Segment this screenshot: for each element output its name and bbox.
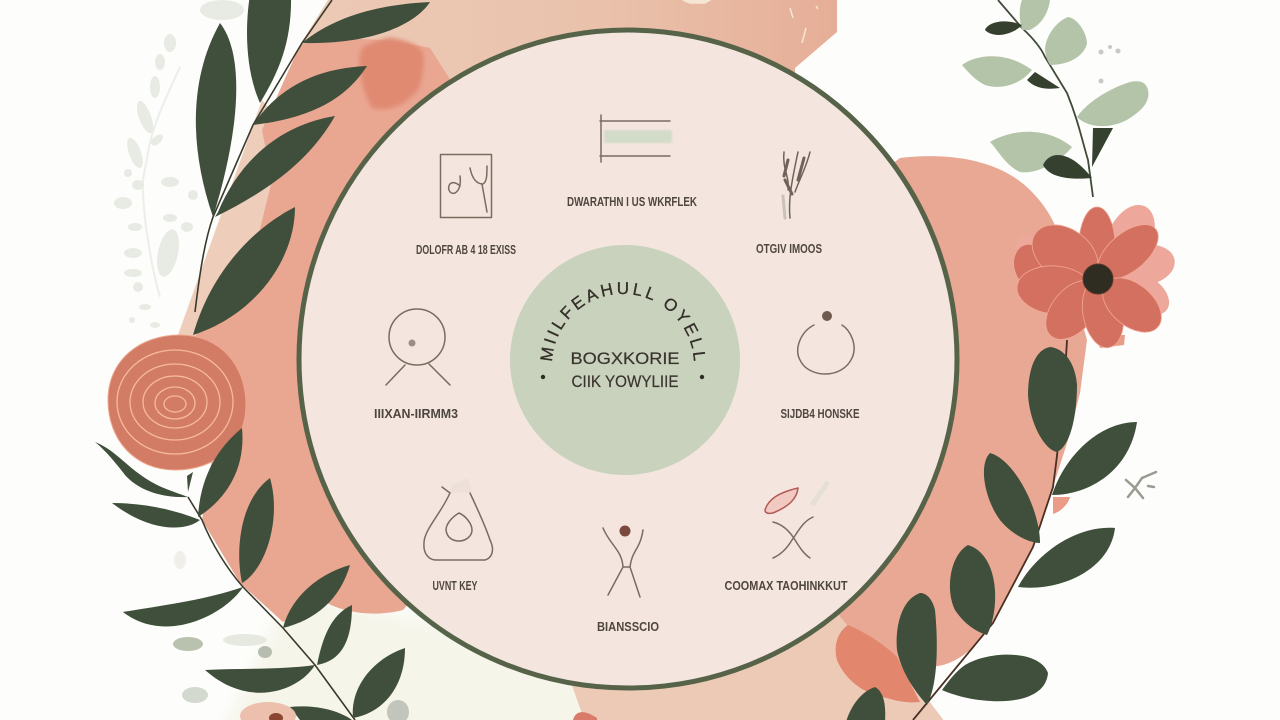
coral fragments [1053,335,1125,514]
label: UVNT KEY [432,578,478,593]
leaf [985,21,1022,35]
icon: bar [600,115,672,162]
leaf [196,23,236,217]
leaf [353,648,405,718]
label: OTGIV IMOOS [756,241,822,256]
bottom coral petal [573,712,597,720]
leaf [239,478,274,583]
leaf [1092,128,1113,167]
pale peach wedge on the left [178,100,330,350]
leaf [897,593,937,705]
leaf [290,706,352,720]
label: DWARATHN I US WKRFLEK [567,194,697,209]
item: bottom left [424,478,492,593]
icon: ring [798,311,854,374]
icon: figure [603,526,643,597]
specks [1098,45,1120,84]
bottom left branch [95,428,405,720]
back petals [1009,197,1178,323]
label: DOLOFR AB 4 18 EXISS [416,242,516,257]
centre line one: BOGXKORIE [570,350,680,368]
curved title [552,294,694,365]
coral blob bottom right [836,625,920,702]
item: bottom centre [597,526,659,634]
item: top right [756,152,822,256]
icon: framed instrument [440,154,492,218]
leaf [253,66,367,125]
leaf [1020,0,1050,30]
small bottom flower [240,702,296,720]
leaf [1027,72,1060,89]
icon: figure with pink shape [765,482,828,558]
leaf [962,56,1032,87]
label: COOMAX TAOHINKKUT [724,578,848,593]
leaf [1045,17,1087,65]
main circle [299,30,957,688]
large flower [1009,197,1178,351]
centre bullets [541,375,704,379]
icon: wheat [783,152,810,218]
leaf [317,605,352,665]
centre circle [510,245,740,475]
item: bottom right [724,482,848,593]
peach top and centre shape [300,0,837,340]
centre circle: MIILFEAHULL OYELL [540,282,706,361]
leaf [205,665,315,693]
item: middle right [780,311,860,421]
item: middle left [374,309,458,421]
label: BIANSSCIO [597,619,659,634]
leaf [198,428,242,517]
item: top centre [567,115,697,209]
leaf [123,587,243,626]
right branch [846,340,1137,720]
faint background sprig left [114,0,244,328]
rose [108,335,246,470]
leaf [247,0,291,103]
icon: circle on legs [386,309,450,385]
leaf [112,503,200,528]
coral blob top left [360,38,424,109]
leaf [846,687,885,720]
icon: flask sack [424,478,492,560]
leaf [283,565,350,628]
item: top left [416,154,516,257]
centre line two: CIIK YOWYLIIE [572,373,678,391]
leaf [1028,347,1077,452]
leaf [215,116,335,217]
leaf [950,545,995,635]
leaf [193,207,295,335]
small insect [1126,472,1156,498]
salmon left shape [196,39,628,622]
top left branch [193,0,430,335]
pale cream wash [220,590,600,720]
leaf [1052,422,1137,495]
front petals [1009,207,1172,351]
leaf [942,655,1048,701]
leaf [1018,528,1115,588]
leaf [1043,155,1092,179]
upper right sprig [962,0,1148,197]
leaf [187,472,193,492]
leaf [1077,81,1148,126]
leaf [984,453,1040,543]
pale bottom right base [570,610,945,720]
leaf [302,2,430,43]
top edge accents [683,0,818,43]
flower centre [1083,264,1113,294]
salmon right shape [628,156,1087,669]
faint bottom left buds [173,551,409,720]
leaf [95,442,188,497]
leaf [990,132,1072,172]
label: IIIXAN-IIRMM3 [374,406,458,421]
label: SIJDB4 HONSKE [780,406,860,421]
